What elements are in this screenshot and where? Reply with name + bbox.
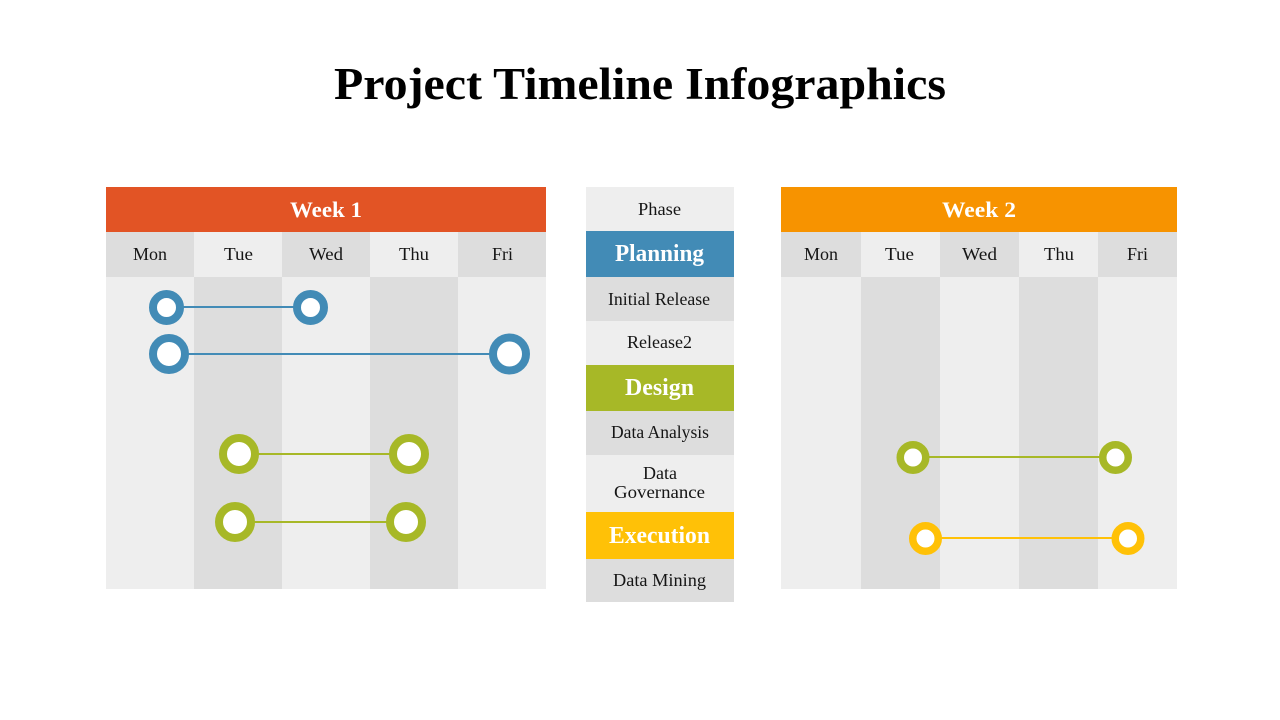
week 1 day: Thu: Thu (399, 244, 429, 264)
week 1 grid columns (106, 277, 546, 589)
week 2 day: Thu (1019, 232, 1098, 277)
week 2 day: Tue: Tue (885, 244, 914, 264)
week 2 day: Wed: Wed (962, 244, 997, 264)
row: Data Governance: Governance (614, 482, 705, 502)
phase: Execution (586, 512, 734, 559)
week 2 day: Thu: Thu (1044, 244, 1074, 264)
row: Initial Release (586, 277, 734, 321)
week 1 day: Mon (106, 232, 194, 277)
week 2 day: Fri: Fri (1127, 244, 1148, 264)
week 1 header: Week 1 (290, 197, 362, 222)
row: Data Analysis: Data Analysis (611, 422, 709, 442)
row: Data Governance (586, 455, 734, 512)
week 2 day: Mon: Mon (804, 244, 838, 264)
week 1 day: Fri (458, 232, 546, 277)
timeline bar: Data Governance (219, 506, 422, 538)
panel: phase list (586, 187, 734, 602)
week 2 header (781, 187, 1177, 232)
timeline bar: Data Analysis (223, 438, 425, 470)
row: Data Mining (586, 559, 734, 602)
week 1 day: Mon: Mon (133, 244, 167, 264)
week 2 day: Wed (940, 232, 1019, 277)
phase: Planning (586, 231, 734, 277)
timeline bar: Release2 (153, 338, 526, 370)
week 2 day: Mon (781, 232, 861, 277)
row: Release2: Release2 (627, 332, 692, 352)
row: Initial Release: Initial Release (608, 289, 710, 309)
row: Data Mining: Data Mining (613, 570, 706, 590)
row: Release2 (586, 321, 734, 365)
timeline bar: Data Analysis week 2 (900, 445, 1128, 470)
phase: Design (586, 365, 734, 411)
phase: Design: Design (625, 375, 694, 401)
title: Project Timeline Infographics (334, 59, 946, 109)
timeline bar: Data Mining week 2 (913, 526, 1141, 551)
row: Data Analysis (586, 411, 734, 455)
week 1 header (106, 187, 546, 232)
phase heading (586, 187, 734, 231)
panel: week 1 (106, 187, 546, 589)
timeline bar: Initial Release (153, 294, 324, 321)
week 1 day: Wed: Wed (309, 244, 343, 264)
week 1 day: Wed (282, 232, 370, 277)
phase: Planning: Planning (615, 241, 704, 267)
phase heading: Phase (638, 199, 681, 219)
week 1 day: Thu (370, 232, 458, 277)
phase: Execution: Execution (609, 523, 710, 549)
week 2 day: Fri (1098, 232, 1177, 277)
week 1 day: Tue (194, 232, 282, 277)
week 1 day: Tue: Tue (224, 244, 253, 264)
panel: week 2 (781, 187, 1177, 589)
week 2 grid columns (781, 277, 1177, 589)
week 2 day: Tue (861, 232, 940, 277)
week 2 header: Week 2 (942, 197, 1016, 222)
week 1 day: Fri: Fri (492, 244, 513, 264)
row: Data Governance: Data (643, 463, 677, 483)
